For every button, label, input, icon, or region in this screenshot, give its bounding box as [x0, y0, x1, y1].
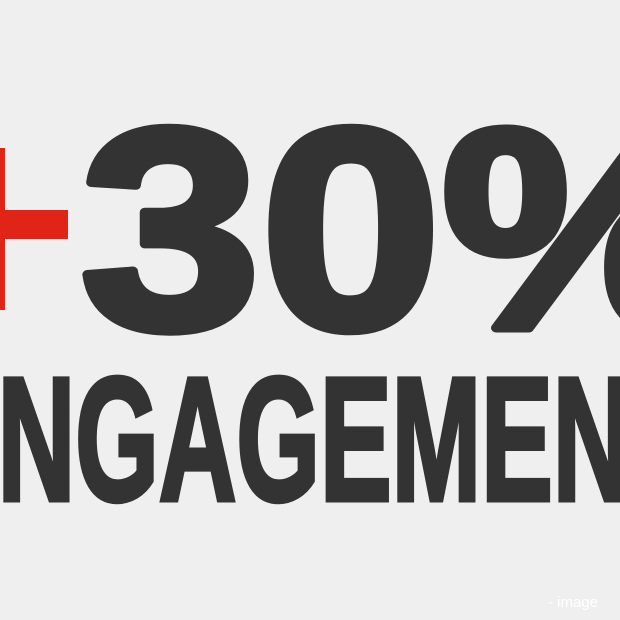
icon: red plus sign — [0, 148, 68, 310]
watermark: - image — [548, 594, 598, 611]
